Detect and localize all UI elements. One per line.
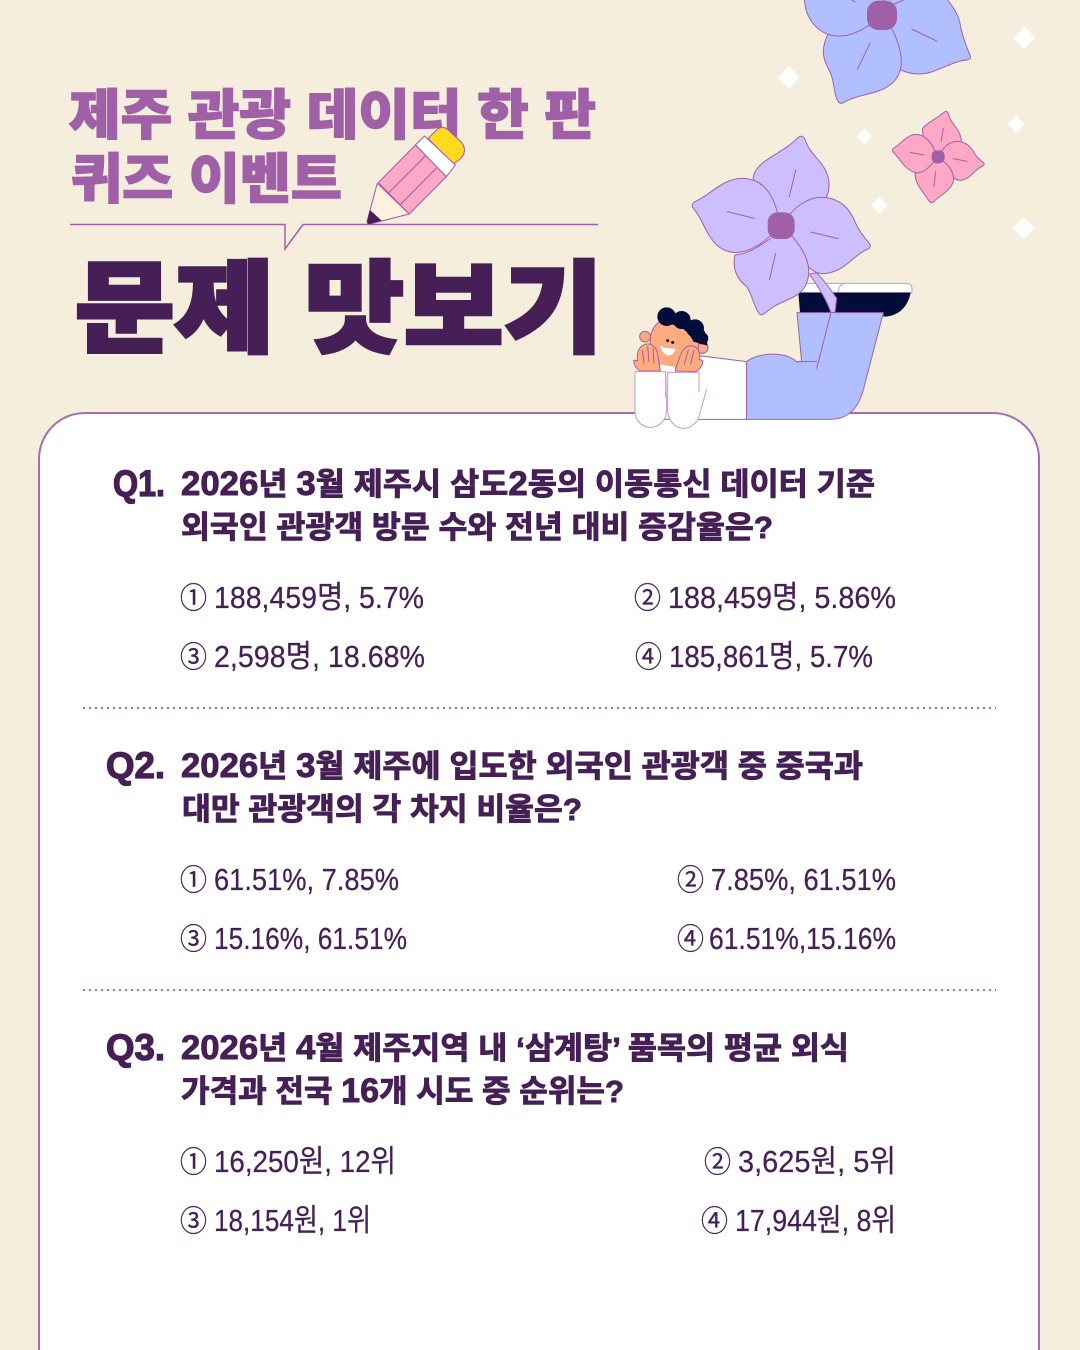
panel: quiz card [39,413,1039,1350]
answer options for question 1: ① [180,575,207,617]
question 1: Q1. [113,463,165,504]
icon: character body [663,313,883,419]
answer options for question 2 [180,857,896,958]
icon: pot [798,283,912,317]
answer options for question 3: 17,944원, 8위 [735,1203,896,1238]
question 2 [106,745,863,827]
answer options for question 3: 18,154원, 1위 [214,1203,371,1238]
answer options for question 1: 188,459명, 5.86% [668,580,896,615]
answer options for question 2: ④ [677,916,704,958]
answer options for question 3: ② [704,1139,731,1181]
answer options for question 3: ① [180,1139,207,1181]
question 3 [106,1027,849,1110]
answer options for question 2: ③ [180,916,207,958]
icon: lilac flower on stem [692,136,870,315]
question 3: 가격과 전국 16개 시도 중 순위는? [181,1072,624,1110]
question 1: 2026년 3월 제주시 삼도2동의 이동통신 데이터 기준 [181,465,875,503]
answer options for question 3: ④ [701,1198,728,1240]
question 2: 대만 관광객의 각 차지 비율은? [182,792,582,827]
speech-bubble divider line [70,224,598,249]
answer options for question 2: ② [677,857,704,899]
answer options for question 2: ① [180,857,207,899]
answer options for question 1: 185,861명, 5.7% [669,639,873,674]
title: quiz event heading: 퀴즈 이벤트 [71,135,342,214]
answer options for question 2: 61.51%, 7.85% [214,862,399,897]
answer options for question 1: 188,459명, 5.7% [214,580,424,615]
question 2: Q2. [106,745,165,786]
icon: sparkles [780,28,1034,237]
icon: pencil [367,127,465,224]
question 3: Q3. [106,1027,165,1068]
answer options for question 1: 2,598명, 18.68% [214,639,425,674]
answer options for question 3: ③ [180,1198,207,1240]
answer options for question 3 [180,1139,896,1240]
icon: character head, hands and sleeves [634,307,708,428]
question 2: 2026년 3월 제주에 입도한 외국인 관광객 중 중국과 [181,747,863,785]
answer options for question 3: 16,250원, 12위 [214,1144,396,1179]
question 1 [113,463,875,545]
question 1: 외국인 관광객 방문 수와 전년 대비 증감율은? [181,510,773,545]
answer options for question 1: ③ [180,634,207,676]
illustration: flowers, sparkles and lying character [663,0,1034,419]
answer options for question 1 [180,575,896,676]
icon: blue flower [804,0,971,103]
answer options for question 2: 15.16%, 61.51% [214,921,407,956]
answer options for question 1: ④ [635,634,662,676]
answer options for question 2: 7.85%, 61.51% [711,862,896,897]
icon: pink flower [892,111,984,203]
answer options for question 3: 3,625원, 5위 [738,1144,896,1179]
answer options for question 1: ② [634,575,661,617]
title: quiz event heading: 제주 관광 데이터 한 판 [69,71,596,150]
title: quiz event heading [69,71,596,214]
answer options for question 2: 61.51%,15.16% [709,921,896,956]
headline: 문제 맛보기: 문제 맛보기 [75,228,603,373]
question 3: 2026년 4월 제주지역 내 ‘삼계탕’ 품목의 평균 외식 [181,1029,849,1067]
